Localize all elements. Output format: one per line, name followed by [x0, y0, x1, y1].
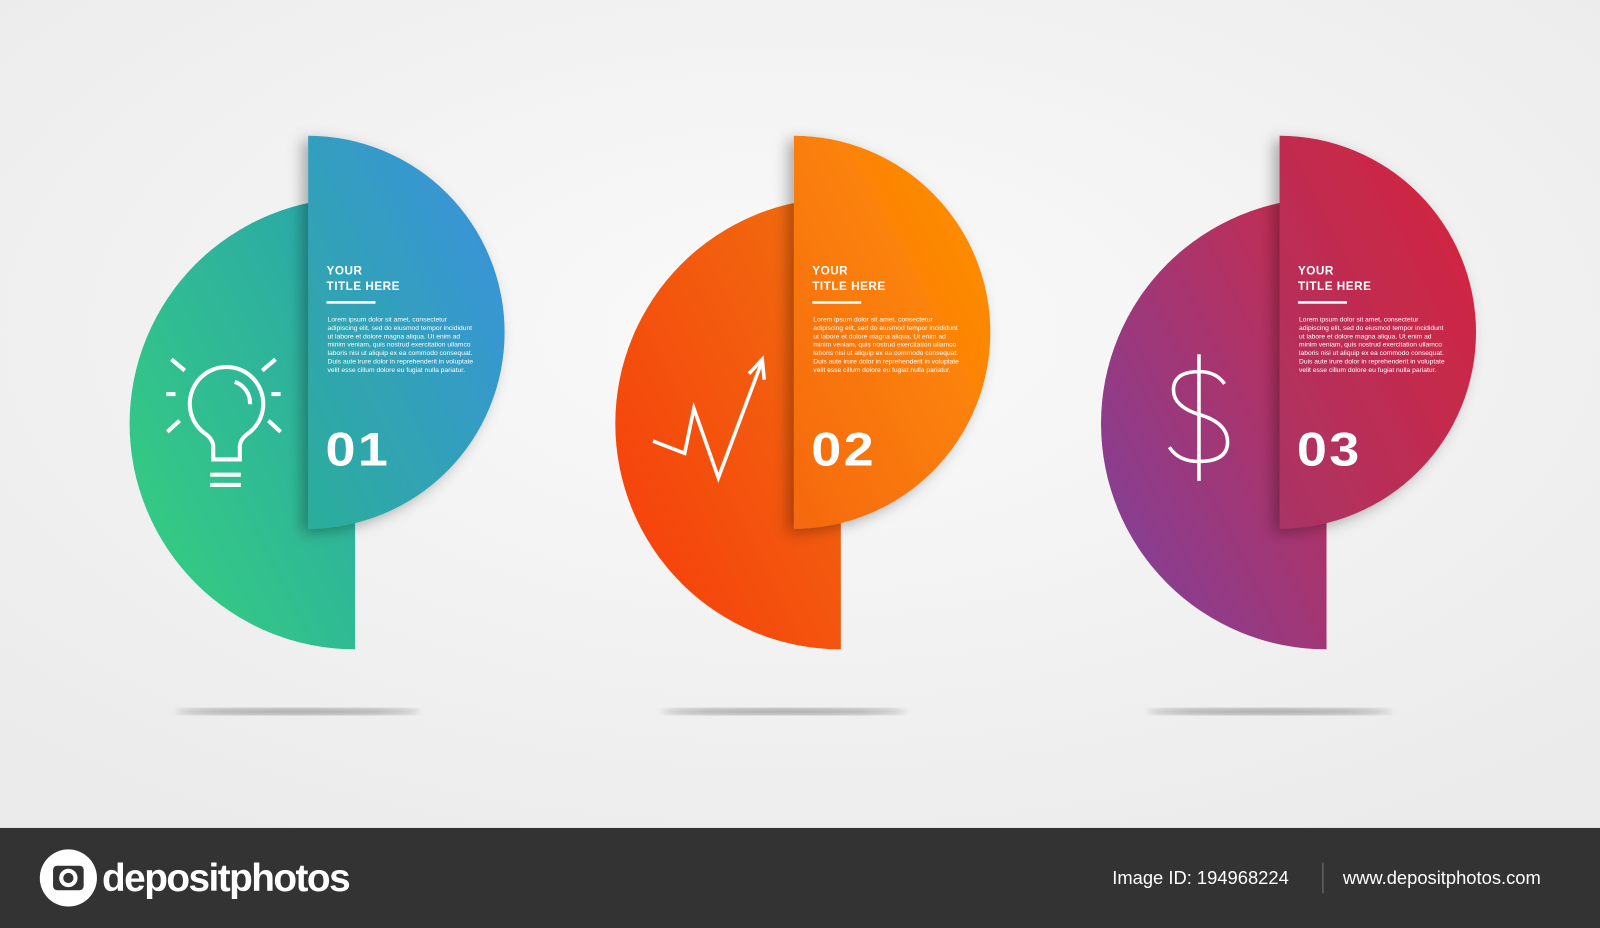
text 3	[1299, 317, 1445, 374]
number 03: 03	[1297, 423, 1362, 476]
image id: Image ID: 194968224	[1112, 867, 1289, 888]
number 02: 02	[811, 423, 876, 476]
icon: light bulb	[166, 359, 281, 485]
title 2: TITLE HERE	[812, 280, 886, 293]
number 01: 01	[326, 423, 390, 476]
left half circle 1	[130, 198, 355, 649]
logo	[40, 849, 349, 907]
title 3: YOUR	[1298, 265, 1334, 278]
item 3	[1101, 136, 1476, 715]
item 2	[615, 136, 990, 715]
logo: depositphotos	[102, 857, 349, 900]
text 1	[328, 317, 473, 374]
title 3	[1298, 265, 1371, 304]
right half circle 2	[794, 136, 990, 529]
left half circle 3	[1101, 198, 1327, 649]
footer bar	[0, 828, 1600, 928]
text 2	[813, 317, 959, 374]
icon: dollar	[1169, 354, 1228, 481]
title 1: YOUR	[327, 265, 362, 278]
right half circle 3	[1280, 136, 1476, 529]
title 2: YOUR	[812, 265, 848, 278]
title 1	[327, 265, 400, 304]
title 1: TITLE HERE	[327, 280, 400, 293]
right half circle 1	[308, 136, 505, 529]
item 1	[130, 136, 505, 715]
left half circle 2	[615, 198, 841, 649]
url: www.depositphotos.com	[1342, 867, 1541, 888]
title 2	[812, 265, 886, 304]
title 3: TITLE HERE	[1298, 280, 1371, 293]
icon: growth arrow	[653, 359, 764, 478]
